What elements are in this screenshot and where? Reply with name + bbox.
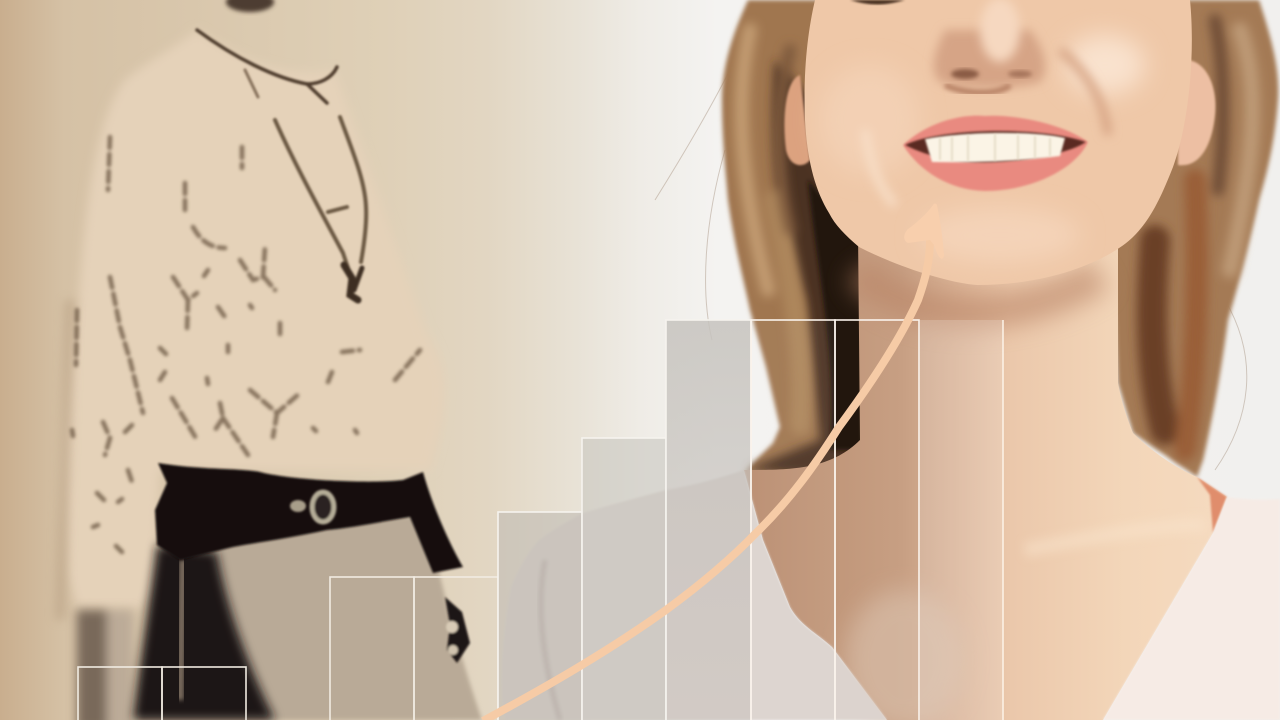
face shading bbox=[820, 35, 1145, 263]
smile crease right bbox=[1060, 50, 1108, 135]
vintage skirt dark fold bbox=[133, 545, 275, 720]
collarbone highlight bbox=[1025, 525, 1205, 550]
bar 10 right edge bbox=[1002, 320, 1004, 720]
vintage blouse bbox=[65, 30, 444, 608]
left hair dark underlayer bbox=[745, 60, 870, 480]
nose highlight bbox=[980, 0, 1020, 62]
lips bbox=[903, 116, 1088, 191]
vintage collar line bbox=[197, 30, 337, 103]
bar 10 bbox=[919, 320, 1003, 720]
bar 10 fill bbox=[919, 320, 1003, 720]
clasp dark shape bbox=[445, 597, 470, 663]
vintage necklace bbox=[275, 117, 366, 300]
bar 9 bbox=[835, 320, 919, 720]
right cheek highlight bbox=[1065, 35, 1145, 95]
growth arrow bbox=[483, 204, 944, 720]
vintage woman bbox=[60, 0, 482, 720]
buckle stud bbox=[290, 500, 306, 512]
bar 8 bbox=[751, 320, 835, 720]
blouse fold shadow bbox=[541, 560, 560, 720]
left hair golden strands bbox=[742, 30, 801, 425]
vintage lower arm bbox=[77, 610, 133, 720]
vintage face shadow bbox=[226, 0, 274, 12]
face bbox=[805, 0, 1192, 285]
smile crease left bbox=[865, 130, 895, 205]
lower chest light bbox=[845, 590, 965, 720]
ear right bbox=[1178, 59, 1215, 165]
right nostril bbox=[1008, 70, 1032, 78]
neck and chest bbox=[744, 230, 1227, 720]
vintage left edge shade bbox=[60, 300, 70, 620]
mouth opening bbox=[905, 131, 1086, 162]
bar chart bbox=[78, 320, 1003, 720]
ear left bbox=[784, 75, 810, 165]
blouse left shoulder bbox=[502, 470, 887, 720]
buckle ring bbox=[312, 492, 334, 522]
vintage arm dark side bbox=[77, 610, 107, 720]
vintage buckle bbox=[290, 492, 334, 522]
vintage skirt bbox=[140, 515, 482, 720]
bar 6 bbox=[582, 438, 666, 720]
bar 5 bbox=[498, 512, 582, 720]
bar 3 bbox=[330, 577, 414, 720]
clasp light dots bbox=[446, 621, 458, 633]
vintage dark sash bbox=[155, 463, 463, 573]
bar 2 bbox=[162, 667, 246, 720]
arrow shaft bbox=[483, 240, 930, 720]
teeth gaps bbox=[940, 134, 1050, 161]
bar 7 bbox=[666, 320, 751, 720]
left nostril bbox=[951, 69, 979, 79]
left cheek light bbox=[820, 65, 920, 175]
left hair bbox=[722, 0, 870, 480]
vintage arm light side bbox=[107, 610, 133, 720]
eye lashes left bbox=[850, 0, 905, 4]
arrow head bbox=[904, 204, 944, 259]
blouse right side bbox=[1103, 497, 1280, 720]
teeth bbox=[925, 133, 1065, 162]
nose base shadow bbox=[934, 30, 1045, 88]
vintage skirt clasp bbox=[445, 597, 470, 663]
modern woman bbox=[502, 0, 1280, 720]
left hair darkest under jaw bbox=[808, 180, 862, 450]
chin light bbox=[920, 207, 1080, 263]
right hair bbox=[1110, 0, 1278, 477]
wispy hair strands bbox=[655, 60, 1247, 470]
vintage blouse lace pattern bbox=[72, 137, 420, 552]
right hair shading bbox=[1152, 20, 1252, 450]
shoulder peach tab bbox=[1197, 477, 1227, 533]
vintage skirt light stripe bbox=[180, 560, 183, 700]
under-chin shadow bbox=[860, 270, 1100, 312]
under-nose shadow bbox=[945, 85, 1010, 92]
bar 4 bbox=[414, 577, 498, 720]
nose bbox=[934, 0, 1045, 92]
bar 1 bbox=[78, 667, 162, 720]
